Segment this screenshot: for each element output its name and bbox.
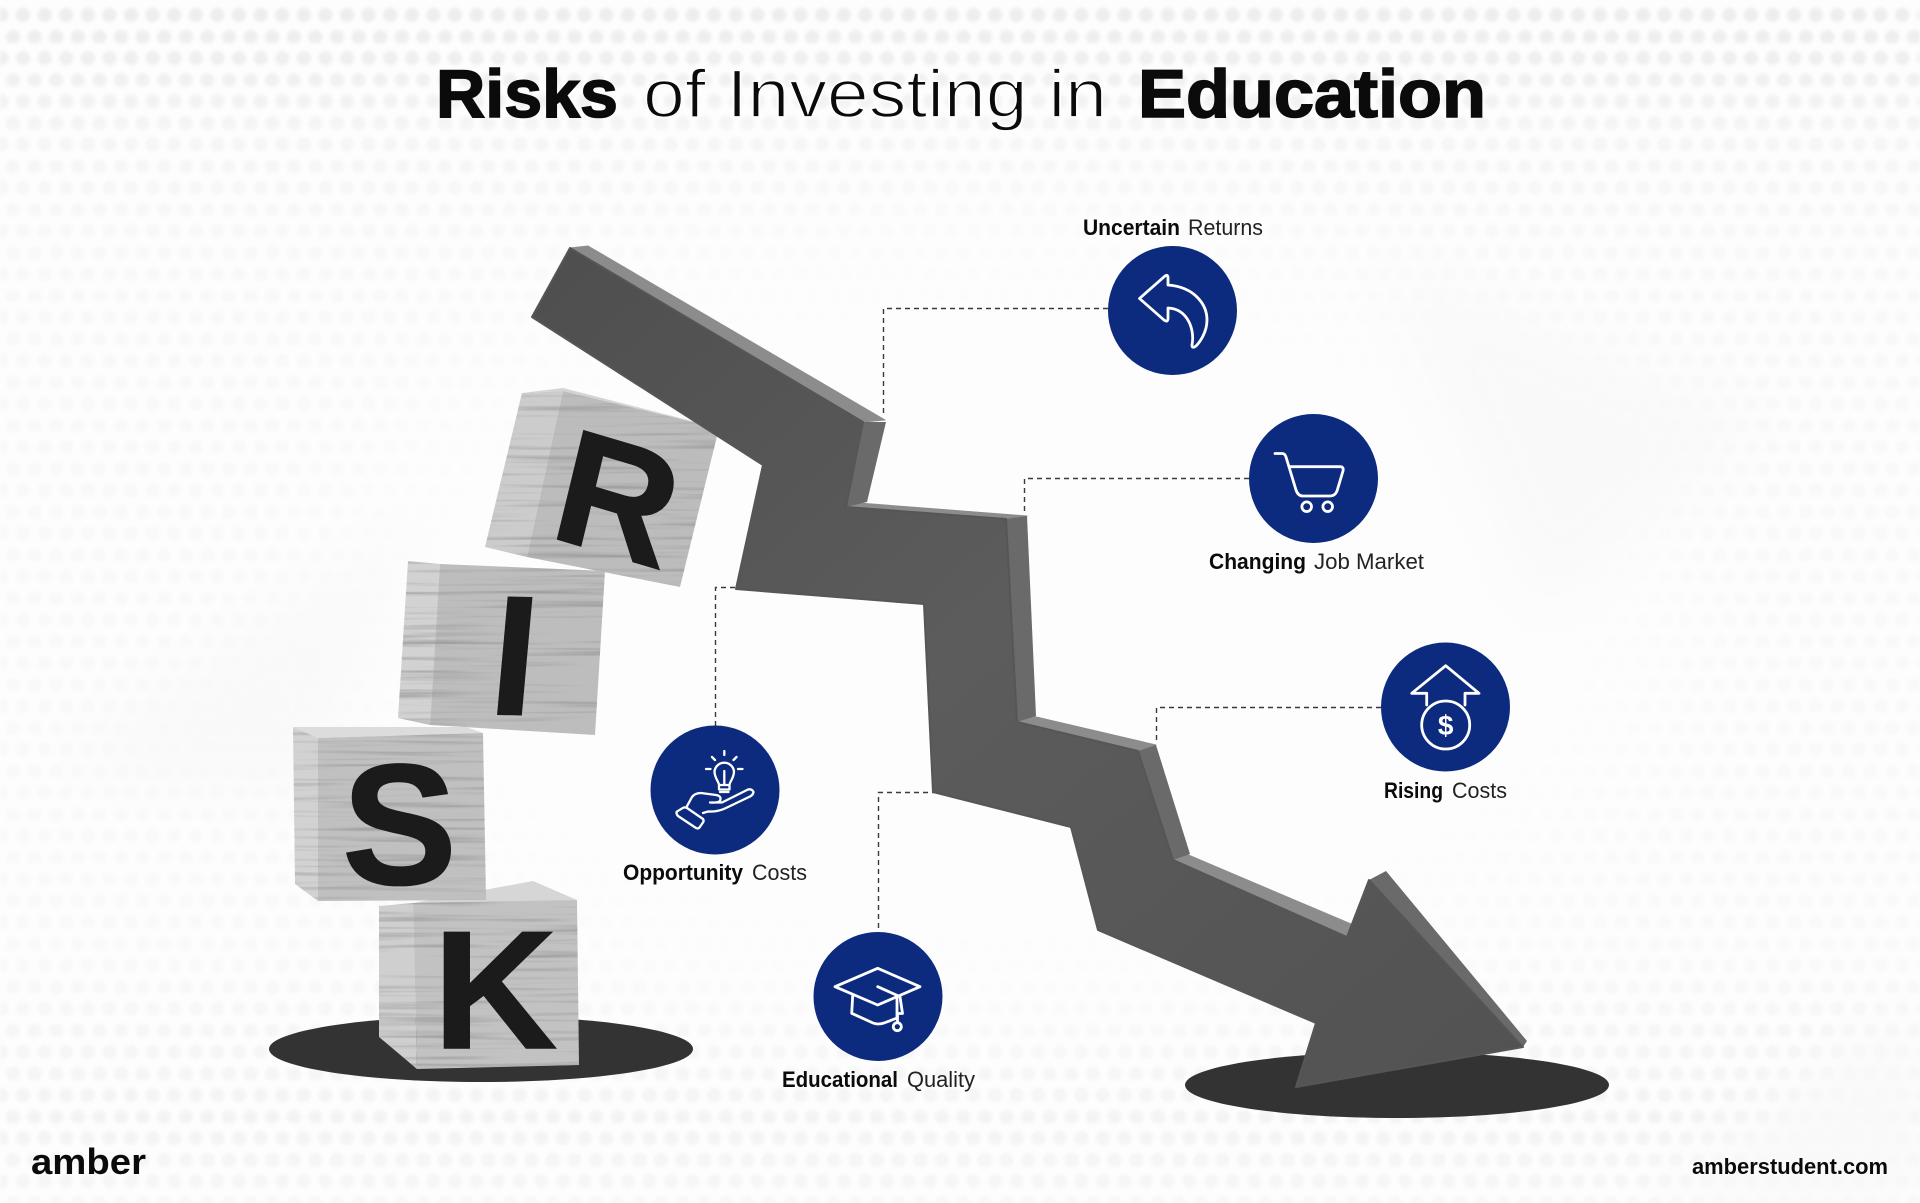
item: Rising Costs: $: [1438, 710, 1454, 741]
item: Changing Job Market: [1209, 414, 1424, 574]
block S: [293, 727, 486, 921]
block R: [485, 388, 719, 604]
icon: rising cost arrow: [1412, 666, 1479, 749]
dashed connectors: [716, 308, 1381, 928]
item: Uncertain Returns: Uncertain: [1083, 215, 1180, 240]
logo: amber: amber: [31, 1141, 146, 1182]
item: Opportunity Costs: Opportunity: [623, 860, 744, 885]
title: of Investing in: [643, 56, 1107, 132]
item: Rising Costs: Rising: [1384, 778, 1443, 803]
shadow ellipse: right: [1185, 1052, 1609, 1118]
title: Risks: [436, 56, 618, 132]
block I: [398, 561, 605, 752]
item: Uncertain Returns: Returns: [1188, 215, 1263, 240]
falling arrow: [532, 246, 1527, 1087]
block R: R: [539, 394, 696, 604]
item: Changing Job Market: Job Market: [1314, 549, 1424, 574]
title: Education: [1138, 56, 1486, 132]
block K: K: [433, 896, 557, 1084]
item: Educational Quality: Educational: [782, 1067, 898, 1092]
arrow side faces: [846, 422, 1527, 1047]
item: Educational Quality: [782, 932, 975, 1092]
arrow front face: [532, 248, 1523, 1087]
risk blocks illustration: [293, 388, 719, 1084]
item: Uncertain Returns: [1083, 215, 1263, 375]
icon: hand with lightbulb: [677, 751, 754, 828]
item: Educational Quality: Quality: [907, 1067, 975, 1092]
block I: I: [484, 561, 546, 752]
arrow lit edges: [570, 246, 1351, 937]
item: Rising Costs: Costs: [1452, 778, 1507, 803]
item: Rising Costs: [1381, 642, 1510, 803]
shadow ellipse: left: [269, 1016, 693, 1082]
item: Opportunity Costs: Costs: [752, 860, 807, 885]
title: [436, 56, 1486, 132]
item: Changing Job Market: Changing: [1209, 549, 1306, 574]
icon: graduation cap: [835, 968, 920, 1031]
icon: return arrow: [1140, 275, 1207, 347]
website url: amberstudent.com: [1692, 1154, 1888, 1179]
icon: shopping cart: [1275, 454, 1343, 512]
block S: S: [342, 729, 457, 921]
block K: [379, 881, 579, 1084]
item: Opportunity Costs: [623, 726, 807, 885]
